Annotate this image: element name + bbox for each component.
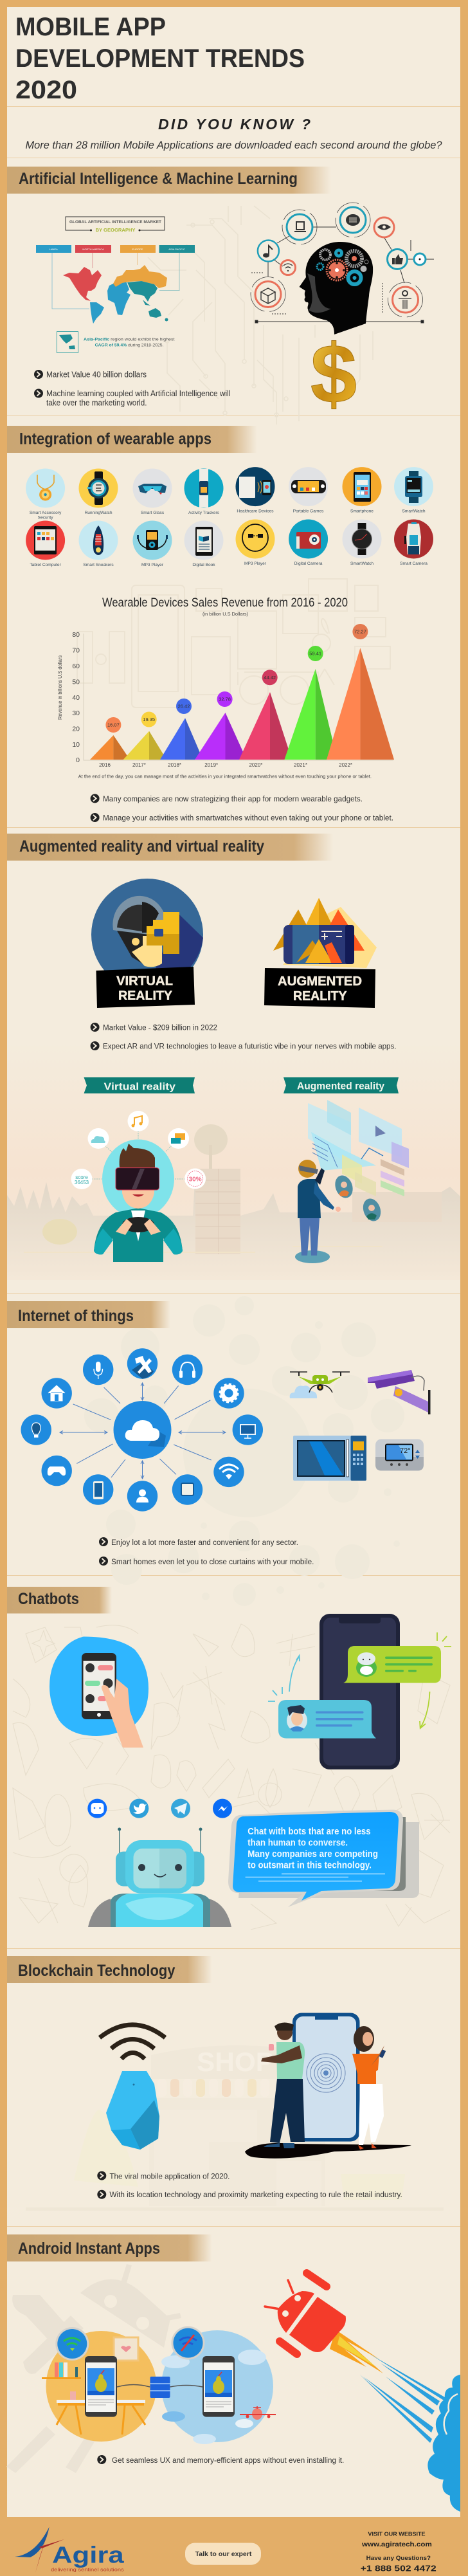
icon: portable games: Portable Games — [293, 509, 324, 514]
icon: smart glass — [132, 468, 172, 515]
illustration: people with phone — [245, 2013, 411, 2159]
hologram panels — [308, 1100, 409, 1196]
map title box — [66, 217, 165, 233]
speech bubble callout: than human to converse. — [248, 1837, 348, 1848]
augmented reality label — [264, 968, 375, 1008]
man figure — [261, 2022, 305, 2148]
city and forest backdrop — [7, 1124, 460, 1280]
speech bubble callout — [228, 1810, 419, 1907]
icon: twitter — [129, 1799, 148, 1818]
VR floating bubbles — [71, 1111, 206, 1189]
device icons row 2 — [26, 520, 433, 567]
icon: gear — [213, 1378, 244, 1409]
icon: digital book: Digital Book — [192, 563, 215, 567]
y axis: 20 — [72, 726, 80, 733]
icon: thermostat: 72° — [400, 1447, 411, 1455]
pyramids — [90, 648, 394, 760]
section heading: Internet of things — [18, 1307, 134, 1325]
contact details — [361, 2530, 437, 2573]
section heading: Blockchain Technology — [18, 1962, 176, 1980]
phone offline — [203, 2356, 235, 2417]
section heading: Integration of wearable apps — [19, 430, 212, 448]
icon: portable games — [289, 467, 328, 514]
value bubbles: 32.78 — [219, 696, 231, 702]
panel: chatbots — [7, 1587, 451, 1930]
icon: messenger — [213, 1799, 232, 1818]
icon: wifi — [213, 1457, 244, 1487]
icon: arrows and sparks — [268, 1632, 451, 1728]
chart title: Wearable Devices Sales Revenue from 2016 - 2020 — [102, 596, 348, 610]
faint shop background — [26, 2045, 444, 2211]
icon: sneakers — [78, 521, 118, 567]
footer — [15, 2527, 437, 2573]
contact details: Have any Questions? — [366, 2555, 431, 2561]
icon: tools — [127, 1348, 158, 1379]
icon: smartwatch — [394, 467, 433, 514]
y axis: 0 — [76, 756, 80, 764]
user message bubble — [278, 1700, 376, 1739]
icon: earbuds — [235, 520, 275, 566]
y axis: 60 — [72, 662, 80, 670]
x axis labels: 2020* — [249, 762, 262, 768]
panel: internet of things — [7, 1296, 431, 1606]
contact details: +1 888 502 4472 — [361, 2564, 437, 2573]
section heading: Augmented reality and virtual reality — [19, 837, 264, 855]
augmented reality label: REALITY — [293, 989, 347, 1003]
section heading — [7, 167, 331, 194]
x axis labels: 2018* — [168, 762, 181, 768]
bullet: market value: Market Value - $209 billion in 2022 — [103, 1024, 217, 1032]
wifi on bubble — [55, 2327, 89, 2361]
did you know block — [26, 116, 442, 151]
x axis labels — [99, 762, 352, 768]
blue exhaust streaks — [360, 2354, 445, 2443]
region labels — [36, 245, 195, 253]
section heading: Artificial Intelligence & Machine Learning — [19, 170, 298, 188]
region labels: ASIA PACIFIC — [168, 248, 185, 251]
map title box: BY GEOGRAPHY — [95, 227, 135, 233]
icon: gamepad — [41, 1456, 72, 1486]
icon: smartwatch: SmartWatch — [402, 509, 426, 514]
bullet: smart homes: Smart homes even let you to close curtains with your mobile. — [111, 1558, 314, 1566]
icon: chatbot app — [87, 1799, 107, 1818]
icon: human head with gears — [300, 242, 373, 334]
value bubbles: 44.42 — [264, 675, 276, 681]
region labels: NORTH AMERICA — [82, 248, 104, 251]
chart: wearable sales revenue — [57, 596, 394, 780]
company logo — [15, 2527, 125, 2573]
icon: virtual reality badge — [91, 879, 203, 1008]
x axis labels: 2022* — [339, 762, 352, 768]
company logo: delivering sentinel solutions — [51, 2567, 124, 2573]
call to action button: Talk to our expert — [195, 2551, 252, 2558]
satellite icons — [21, 1348, 263, 1512]
icon: digital book — [184, 521, 224, 567]
panel: augmented and virtual reality — [7, 834, 460, 1280]
bullet: machine learning: take over the marketing world. — [46, 397, 147, 408]
bullet: sector convenience: Enjoy lot a lot more faster and convenient for any sector. — [111, 1539, 298, 1547]
faint device background — [77, 579, 390, 708]
virtual reality label — [96, 967, 195, 1008]
y axis: 40 — [72, 694, 80, 702]
bullet: AR and VR vibe: Expect AR and VR technologies to leave a futuristic vibe in your nerves with mobile apps. — [103, 1043, 396, 1051]
illustration: chat phone in hand — [50, 1636, 148, 1748]
speech bubble callout: Many companies are competing — [248, 1849, 378, 1859]
router and cables — [117, 2377, 203, 2398]
map title box: GLOBAL ARTIFICIAL INTELLIGENCE MARKET — [69, 220, 161, 224]
mini map note — [57, 332, 175, 352]
icon: smart accessory: Security — [38, 516, 53, 520]
icon: healthcare devices — [235, 467, 275, 514]
region labels: EUROPE — [132, 248, 143, 251]
did you know block: More than 28 million Mobile Applications are downloaded each second around the globe? — [26, 139, 442, 151]
map connectors — [52, 253, 179, 309]
spoke arrows — [60, 1383, 226, 1479]
call to action button — [185, 2543, 261, 2565]
illustration: android rocket — [265, 2273, 460, 2512]
contact details: VISIT OUR WEBSITE — [368, 2530, 426, 2537]
value bubbles: 72.27 — [354, 629, 366, 634]
icon: mp3 player: MP3 Player — [141, 563, 164, 567]
section heading — [7, 1301, 170, 1328]
world map — [63, 265, 168, 324]
bullet: viral application: The viral mobile application of 2020. — [109, 2173, 230, 2181]
icon: smart camera — [394, 520, 433, 566]
icon: tablet — [26, 521, 65, 567]
icon: home — [41, 1378, 72, 1409]
chart caption: At the end of the day, you can manage most of the activities in your integrated smartwatches without even touching your phone or tablet. — [78, 773, 372, 780]
section heading — [7, 2234, 212, 2261]
value bubbles — [105, 624, 368, 733]
mini map note: Asia-Pacific region would exhibit the highest — [84, 337, 175, 342]
VR floating bubbles: score — [75, 1174, 88, 1180]
device icons row 1 — [26, 467, 433, 520]
icon: smart accessory: Smart Accessory — [30, 511, 62, 515]
icon: monitor — [233, 1414, 263, 1445]
icon: connector network — [251, 227, 434, 323]
panel: blockchain technology — [7, 1956, 444, 2211]
y axis: 50 — [72, 678, 80, 686]
section heading — [7, 426, 257, 453]
icon: thermostat — [375, 1439, 424, 1470]
illustration: large phone with chat bubbles — [268, 1614, 451, 1769]
illustration: robot — [88, 1828, 231, 1927]
virtual reality label: REALITY — [118, 989, 173, 1003]
icon: activity tracker: Activity Trackers — [188, 511, 220, 515]
y axis: 80 — [72, 631, 80, 639]
ribbon: augmented reality: Augmented reality — [297, 1081, 384, 1092]
section heading: Chatbots — [18, 1590, 79, 1608]
blue smoke cloud — [428, 2375, 460, 2512]
illustration: augmented reality person — [295, 1100, 409, 1263]
y axis: 70 — [72, 647, 80, 655]
icon: smartphone: Smartphone — [350, 509, 374, 514]
icon: digital camera — [289, 520, 328, 566]
icon: gold dollar sign: $ — [310, 327, 357, 421]
ribbon: virtual reality — [84, 1077, 195, 1093]
icon: beacon — [106, 2071, 159, 2150]
value bubbles: 59.41 — [309, 651, 321, 656]
icon: digital camera: Digital Camera — [294, 562, 323, 566]
section heading — [7, 834, 333, 861]
icon: chip — [172, 1474, 203, 1505]
ribbon: virtual reality: Virtual reality — [104, 1082, 176, 1092]
chart title: (in billion U.S Dollars) — [203, 611, 248, 617]
icon: running watch: RunningWatch — [84, 511, 113, 515]
icon: smart glass: Smart Glass — [141, 511, 165, 515]
title: DEVELOPMENT TRENDS — [15, 44, 305, 73]
icon: airplane — [240, 2406, 276, 2420]
icon: ringed tech circles — [251, 203, 426, 317]
panel: android instant apps — [6, 2234, 460, 2512]
bullet: smartwatches: Manage your activities with smartwatches without even taking out your phone or tablet. — [103, 814, 393, 822]
x axis labels: 2019* — [204, 762, 218, 768]
ribbon: augmented reality — [284, 1077, 399, 1093]
faint globe and icon background — [84, 1296, 404, 1606]
social icons row — [87, 1799, 232, 1818]
chart title — [102, 596, 348, 617]
icon: healthcare devices: Healthcare Devices — [237, 509, 274, 514]
section heading — [7, 1587, 112, 1613]
icon: smart accessory — [26, 468, 65, 520]
mini map note: CAGR of 59.4% during 2018-2025. — [95, 343, 164, 348]
section heading — [7, 1956, 212, 1983]
hub and spoke diagram — [21, 1348, 263, 1512]
icon: augmented reality badge — [264, 898, 377, 1008]
y axis: 10 — [72, 741, 80, 749]
cloud hub — [113, 1401, 171, 1459]
bullet: location technology: With its location technology and proximity marketing expecting to rule the retail industry. — [109, 2191, 402, 2199]
illustration: virtual reality man — [71, 1111, 206, 1262]
value bubbles: 19.35 — [143, 717, 155, 722]
panel: artificial intelligence — [7, 167, 434, 425]
faint android background — [6, 2264, 181, 2473]
icon: light bulb — [21, 1414, 51, 1445]
icon: wifi arcs — [100, 2025, 165, 2059]
woman figure — [352, 2026, 386, 2150]
hologram avatars — [332, 1173, 384, 1223]
bullet: market value: Market Value 40 billion dollars — [46, 370, 147, 379]
icon: smartphone — [342, 467, 382, 514]
bullet: machine learning — [34, 388, 230, 408]
icon: running watch — [78, 468, 118, 515]
icon: telegram — [171, 1799, 190, 1818]
title: MOBILE APP — [15, 13, 166, 41]
VR floating bubbles: 36453 — [75, 1180, 89, 1185]
icon: phone — [83, 1474, 113, 1505]
icon: headphones — [172, 1355, 203, 1385]
icon: tablet: Tablet Computer — [30, 563, 62, 567]
region labels: LAMEA — [49, 248, 58, 251]
icon: user — [127, 1481, 158, 1512]
icon: earbuds: MP3 Player — [244, 562, 267, 566]
contact details: www.agiratech.com — [361, 2541, 432, 2548]
section heading: Android Instant Apps — [18, 2240, 160, 2258]
bullet: machine learning: Machine learning coupled with Artificial Intelligence will — [46, 388, 230, 398]
title: 2020 — [15, 76, 77, 104]
icon: microwave — [293, 1436, 366, 1481]
phone online — [85, 2356, 117, 2417]
speech bubble callout: to outsmart in this technology. — [248, 1860, 372, 1871]
bullet: seamless UX: Get seamless UX and memory-efficient apps without even installing it. — [112, 2457, 344, 2465]
icon: security camera — [368, 1370, 431, 1414]
value bubbles: 26.42 — [178, 704, 190, 709]
speech bubble callout: Chat with bots that are no less — [248, 1826, 371, 1837]
icon: analog smartwatch: SmartWatch — [350, 562, 374, 566]
title — [15, 13, 305, 104]
bot message bubble — [343, 1646, 441, 1683]
icon: smart camera: Smart Camera — [400, 562, 428, 566]
icon: mp3 player — [132, 521, 172, 567]
value bubbles: 16.07 — [107, 722, 120, 728]
illustration: online vs offline phones — [42, 2326, 276, 2444]
doodle background — [13, 1624, 450, 1930]
icon: sneakers: Smart Sneakers — [83, 563, 114, 567]
y axis — [57, 631, 393, 764]
icon: activity tracker — [184, 468, 224, 515]
android body — [265, 2273, 346, 2354]
x axis labels: 2017* — [132, 762, 146, 768]
panel: wearable apps — [7, 426, 433, 822]
x axis labels: 2021* — [294, 762, 307, 768]
company logo: Agira — [52, 2542, 125, 2568]
icon: analog smartwatch — [342, 520, 382, 566]
did you know block: DID YOU KNOW ? — [158, 116, 310, 132]
VR floating bubbles: 30% — [189, 1176, 202, 1183]
virtual reality label: VIRTUAL — [116, 974, 173, 988]
bullet: wearable gadgets: Many companies are now strategizing their app for modern wearable gadgets. — [103, 796, 363, 803]
icon: microphone — [83, 1355, 113, 1385]
wifi off bubble — [171, 2326, 204, 2360]
y axis: 30 — [72, 709, 80, 717]
x axis labels: 2016 — [99, 762, 111, 768]
augmented reality label: AUGMENTED — [278, 974, 362, 989]
flames — [330, 2330, 383, 2373]
icon: drone — [290, 1372, 350, 1398]
circuit background — [148, 206, 373, 425]
y axis: Revenue in billions U.S dollars — [57, 655, 63, 720]
faint shop background: SHOP — [197, 2047, 274, 2077]
